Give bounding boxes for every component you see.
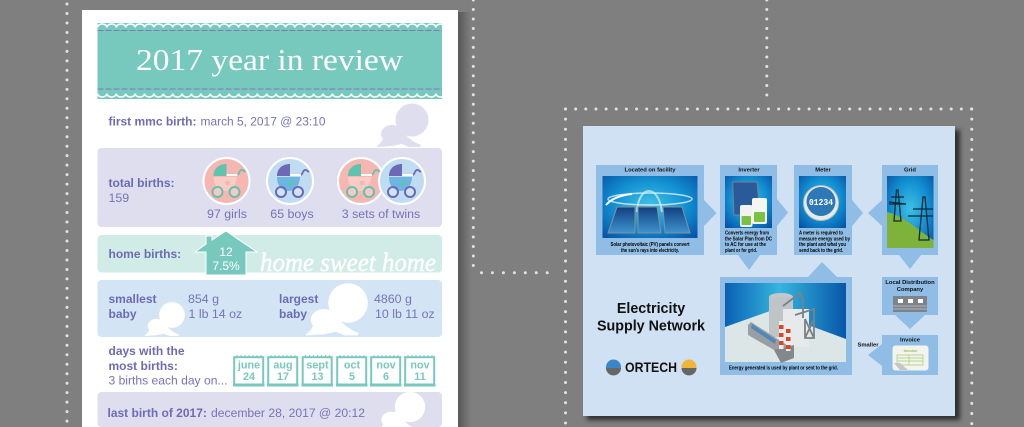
step: meter: 01234 <box>809 198 834 208</box>
calendar: sept 13 <box>302 355 333 386</box>
step: invoice: Invoice <box>904 348 918 353</box>
calendar: aug 17: 17 <box>277 371 289 383</box>
step: inverter: Converts energy from <box>725 230 769 236</box>
icon: house: 7.5% <box>212 259 240 273</box>
baby size panel: baby <box>279 307 307 321</box>
days with the most births: 3 births each day on... <box>108 374 228 388</box>
baby size panel: 854 g <box>188 292 219 306</box>
step: meter: A meter is required to <box>799 230 843 236</box>
calendar: oct 5: 5 <box>349 371 355 383</box>
last birth panel: december 28, 2017 @ 20:12 <box>211 406 365 420</box>
step: power plant <box>720 262 852 375</box>
last birth panel <box>98 392 442 427</box>
days with the most births: days with the <box>108 344 185 358</box>
step: power plant: Energy generated is used by plant or sent to the grid. <box>729 366 839 372</box>
total births panel: total births: <box>108 176 174 190</box>
step: invoice: Invoice <box>900 338 921 344</box>
baby size panel: baby <box>108 307 137 321</box>
total births panel: 159 <box>108 191 129 205</box>
baby size panel: 4860 g <box>374 292 412 306</box>
baby size panel: largest <box>279 292 318 306</box>
step: inverter <box>720 165 788 270</box>
step: meter: the plant and what you <box>799 242 846 248</box>
calendar: nov 6: 6 <box>383 371 389 383</box>
calendar: aug 17: aug <box>273 360 293 372</box>
baby size panel: 1 lb 14 oz <box>188 307 242 321</box>
baby size panel: 10 lb 11 oz <box>375 307 435 321</box>
first birth row: first mmc birth: <box>108 114 196 128</box>
step: local distribution company <box>882 277 938 329</box>
icon: twin strollers <box>338 158 425 204</box>
step: grid <box>868 165 938 269</box>
calendar: nov 6: nov <box>376 360 396 372</box>
title banner <box>98 23 442 99</box>
step: meter: Meter <box>815 168 831 174</box>
step: located on facility <box>596 165 716 255</box>
step: inverter: to AC for use at the <box>725 242 766 248</box>
calendar: oct 5: oct <box>344 360 360 372</box>
calendar: nov 11: 11 <box>414 371 426 383</box>
calendar: sept 13: sept <box>306 360 329 372</box>
home births panel: home births: <box>108 247 181 261</box>
network title: Supply Network <box>597 318 705 334</box>
step: local distribution company: Local Distribution <box>885 280 935 286</box>
logo: ortech: ORTECH <box>625 359 677 375</box>
total births panel <box>98 148 442 227</box>
panel shadow <box>458 12 471 427</box>
days with the most births: most births: <box>108 359 178 373</box>
step: located on facility: the sun's rays into electricity. <box>621 248 680 254</box>
panel: electricity supply network <box>583 126 955 416</box>
network title: Electricity <box>617 301 685 317</box>
icon: house: 12 <box>219 245 233 259</box>
step: local distribution company: Company <box>897 287 924 293</box>
home births panel: home sweet home <box>260 248 436 277</box>
calendar: nov 6 <box>370 355 402 386</box>
label: smaller: Smaller <box>858 343 879 349</box>
step: meter: send back to the grid. <box>799 248 844 254</box>
total births panel: 97 girls <box>207 207 247 221</box>
step: located on facility: Located on facility <box>625 168 676 174</box>
logo: ortech <box>606 359 696 376</box>
baby size panel: smallest <box>108 292 157 306</box>
calendar: nov 11: nov <box>410 360 430 372</box>
step: grid: Grid <box>904 168 916 174</box>
step: invoice <box>868 335 938 375</box>
step: meter: measure energy used by <box>799 236 850 242</box>
days with the most births <box>108 344 436 388</box>
icon: girl stroller <box>204 158 250 204</box>
icon: house <box>195 231 257 275</box>
last birth panel: last birth of 2017: <box>108 406 207 420</box>
total births panel: 65 boys <box>270 207 314 221</box>
total births panel: 3 sets of twins <box>342 207 420 221</box>
calendar: nov 11 <box>404 355 436 386</box>
calendar: june 24 <box>233 355 264 386</box>
calendar: oct 5 <box>336 355 368 386</box>
first birth row <box>108 104 428 147</box>
title banner: 2017 year in review <box>136 42 404 77</box>
step: located on facility: Solar photovoltaic (PV) panels convert <box>610 242 690 248</box>
icon: boy stroller <box>267 158 313 204</box>
network title <box>597 301 705 334</box>
baby size panel <box>98 280 442 337</box>
step: inverter: plant or for grid. <box>725 248 758 254</box>
calendar: sept 13: 13 <box>311 371 324 383</box>
panel: 2017 year in review <box>82 10 458 427</box>
home births panel <box>98 231 442 277</box>
panel shadow <box>587 130 960 420</box>
step: inverter: Inverter <box>738 168 760 174</box>
calendar: aug 17 <box>267 355 298 386</box>
step: meter <box>794 165 863 255</box>
calendar: june 24: 24 <box>243 371 255 383</box>
step: inverter: the Solar Plan from DC <box>725 236 772 242</box>
calendar: june 24: june <box>237 360 260 372</box>
first birth row: march 5, 2017 @ 23:10 <box>200 114 326 128</box>
